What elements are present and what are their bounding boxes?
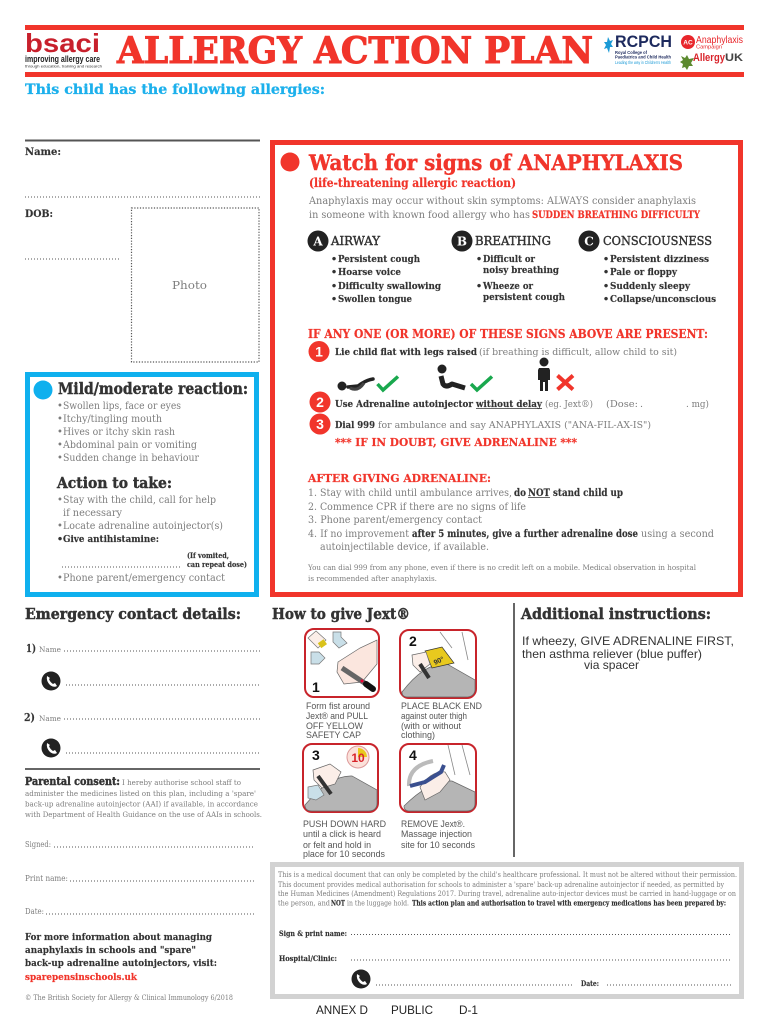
step 3: for ambulance and say ANAPHYLAXIS ("ANA-FIL-AX-IS") [378,420,651,431]
mobile note: is recommended after anaphylaxis. [308,574,437,583]
logo: bsaci [25,28,102,68]
step image 1 [305,629,379,697]
blue dot [34,380,52,400]
intro text: in someone with known food allergy who has [309,209,530,221]
step text 1: Jext® and PULL [306,711,368,721]
action list: • [57,573,63,584]
step 1: 1 [315,344,323,360]
intro text [308,195,701,221]
symptoms list: • [57,453,63,464]
logo: RCPCH: Paediatrics and Child Health [615,54,671,60]
symptoms list [57,401,199,464]
step 2: . [640,399,643,410]
step 2: 2 [316,394,324,410]
subheading: (life-threatening allergic reaction) [309,176,516,190]
symptoms list: Swollen lips, face or eyes [63,401,181,412]
after adrenaline list: do [514,488,526,499]
after adrenaline list: autoinjectilable device, if available. [320,542,489,553]
after adrenaline list: 4. If no improvement [308,529,409,540]
action list: if necessary [63,508,122,519]
parental consent: Parental consent: [25,775,120,788]
column: breathing: Difficult or [483,254,536,265]
mobile note: You can dial 999 from any phone, even if there is no credit left on a mobile. Medical observation in hospital [307,563,697,572]
column: airway: Hoarse voice [338,267,401,278]
step text 4: site for 10 seconds [401,840,475,850]
contact 1 [26,642,260,690]
logo: Anaphylaxis Campaign: AC [683,40,693,46]
step 1: Lie child flat with legs raised [335,347,477,358]
contact 2 [24,711,260,758]
action list: • [57,534,63,545]
step 2: (eg. Jext®) [545,399,593,410]
panel: how to give Jext [272,605,482,859]
anaphylaxis heading: Watch for signs of ANAPHYLAXIS [308,150,683,175]
photo box: Photo [172,278,207,292]
logo: Anaphylaxis Campaign: Anaphylaxis [696,35,743,46]
footer annex text: PUBLIC [391,1003,433,1017]
action list: Phone parent/emergency contact [63,573,225,584]
authorisation text: in the luggage hold. [347,900,409,908]
sign fields: Hospital/Clinic: [279,954,337,963]
intro text: Anaphylaxis may occur without skin symptoms: ALWAYS consider anaphylaxis [308,195,696,207]
step image 2: 2 [409,633,417,649]
action list: can repeat dose) [187,560,247,569]
column: airway: • [331,294,337,305]
instructions text: via spacer [584,658,639,672]
header band [25,25,744,77]
column: airway [308,230,441,305]
column: consciousness [578,230,716,305]
step text 2: (with or without [401,721,461,731]
column: breathing: • [476,254,482,265]
column: airway: • [331,254,337,265]
panel: child details: DOB: [25,208,53,220]
after adrenaline list: using a second [641,529,715,540]
panel: child details: Name: [25,146,61,158]
step 3 [310,414,651,434]
step text 1: Form fist around [306,701,370,711]
column: consciousness: • [603,294,609,305]
step text 3: until a click is heard [303,829,381,839]
column: breathing: BREATHING [475,234,551,248]
symptoms list: Itchy/tingling mouth [63,414,163,425]
parental consent: I hereby authorise school staff to [122,778,241,787]
action list: Give antihistamine: [63,534,159,545]
sign fields [279,929,731,988]
parental consent: with Department of Health Guidance on the use of AAIs in schools. [25,810,262,819]
logo: bsaci: through education, training and research [25,64,102,68]
logo: bsaci: improving allergy care [25,54,100,64]
step text 2: PLACE BLACK END [401,701,482,711]
more information: anaphylaxis in schools and "spare" [25,945,196,956]
after adrenaline list: NOT [528,488,550,499]
step 2: without delay [475,399,542,410]
column: airway: • [331,281,337,292]
parental consent: back-up adrenaline autoinjector (AAI) if available, in accordance [25,800,259,808]
after adrenaline list: after 5 minutes, give a further adrenaline dose [412,529,638,540]
column: airway: Difficulty swallowing [338,281,441,292]
column: airway: AIRWAY [330,234,381,248]
logo: RCPCH: Royal College of [615,50,647,55]
column: breathing: • [476,281,482,292]
footer annex text [316,1003,478,1017]
symptoms list: Sudden change in behaviour [63,453,199,464]
column: airway: A [312,234,323,248]
signs present heading: IF ANY ONE (OR MORE) OF THESE SIGNS ABOVE ARE PRESENT: [308,327,708,341]
contact 2: Name [39,714,62,723]
mild heading: Mild/moderate reaction: [58,379,248,398]
step text 4 [401,819,475,850]
action list: (If vomited, [187,551,229,560]
step 3: 3 [316,416,324,432]
column: consciousness: CONSCIOUSNESS [603,234,712,248]
icon: sitting with tick [438,364,492,390]
instructions text: then asthma reliever (blue puffer) [522,647,702,661]
instructions text: If wheezy, GIVE ADRENALINE FIRST, [522,634,734,648]
instructions text [522,634,734,672]
logo: Allergy UK [680,52,743,70]
column: consciousness: • [603,267,609,278]
step text 4: REMOVE Jext®. [401,819,465,829]
authorisation text: This document provides medical authorisation for schools to administer a 'spare' back-up adrenaline autoinjector if needed, as permitted by [278,881,724,889]
icon: lying flat with tick [338,376,398,390]
step text 3: place for 10 seconds [303,849,385,859]
more information: back-up adrenaline autoinjectors, visit: [25,958,217,969]
after adrenaline list: stand child up [553,488,623,499]
signature lines [25,840,255,916]
after adrenaline list: 1. Stay with child until ambulance arrives, [308,488,512,499]
panel: child details [25,140,260,362]
step image 2 [400,630,476,698]
more information [25,932,217,983]
column: airway: Persistent cough [338,254,420,265]
footer annex text: D-1 [459,1003,478,1017]
column: consciousness: Pale or floppy [610,267,677,278]
step text 3: PUSH DOWN HARD [303,819,386,829]
logo: RCPCH: Leading the way in Children's Health [615,60,671,65]
panel: emergency contact details [24,605,262,1002]
column: airway: Swollen tongue [338,294,412,305]
column: consciousness: Collapse/unconscious [610,294,716,305]
column: consciousness: • [603,281,609,292]
after adrenaline list [307,471,715,553]
panel: mild/moderate reaction [28,374,256,594]
step text 2 [401,701,482,740]
step image 4 [400,744,476,812]
authorisation text: the person, and [278,900,330,908]
intro text: SUDDEN BREATHING DIFFICULTY [532,210,701,221]
authorisation text: NOT [331,898,346,908]
photo box [132,208,259,362]
panel: additional instructions [514,603,734,857]
mobile note [307,563,697,583]
step text 4: Massage injection [401,829,472,839]
red dot [280,152,300,172]
after adrenaline list: 2. Commence CPR if there are no signs of life [308,502,526,513]
Jext heading: How to give Jext® [272,605,410,623]
step text 2: against outer thigh [401,711,467,721]
symptoms list: Abdominal pain or vomiting [62,440,198,451]
column: breathing [452,230,565,303]
action list: • [57,521,63,532]
step 1: (if breathing is difficult, allow child to sit) [479,347,677,358]
step 3: Dial 999 [335,420,375,431]
logo: Allergy UK: UK [725,52,743,64]
step 1 [308,341,677,362]
signature lines: Print name: [25,874,68,883]
column: airway: • [331,267,337,278]
step text 2: clothing) [401,730,435,740]
authorisation text: This is a medical document that can only be completed by the child's healthcare professional. It must not be altered without their permission. [278,871,737,879]
symptoms list: Hives or itchy skin rash [63,427,176,438]
step image 2: 90° [432,655,446,667]
column: breathing: noisy breathing [483,265,559,276]
symptoms list: • [57,414,63,425]
step text 3: or felt and hold in [303,840,371,850]
action list: • [57,495,63,506]
symptoms list: • [57,401,63,412]
action list: Stay with the child, call for help [63,495,216,506]
logo: RCPCH [604,32,672,65]
symptoms list: • [57,427,63,438]
step 2: . mg) [686,399,709,410]
doubt warning: *** IF IN DOUBT, GIVE ADRENALINE *** [335,435,577,449]
symptoms list: • [57,440,63,451]
parental consent: administer the medicines listed on this plan, including a 'spare' [25,789,256,798]
panel: additional instructions: Additional instructions: [520,605,711,623]
step 2: Use Adrenaline autoinjector [335,399,474,410]
column: consciousness: Suddenly sleepy [610,281,690,292]
logo: Anaphylaxis Campaign [681,35,743,50]
contact 1: Name [39,645,62,654]
copyright: © The British Society for Allergy & Clinical Immunology 6/2018 [25,993,233,1002]
title: ALLERGY ACTION PLAN [116,30,593,72]
column: consciousness: C [584,234,594,248]
step image 3: 10 [351,751,365,765]
step image 1: 1 [312,679,320,695]
after adrenaline list: 3. Phone parent/emergency contact [308,515,482,526]
logo: RCPCH: RCPCH [615,32,672,51]
panel: authorisation [272,864,742,996]
signature lines: Date: [25,907,44,916]
after adrenaline list: AFTER GIVING ADRENALINE: [307,471,491,485]
step text 3 [303,819,386,859]
step image 3: 3 [312,747,320,763]
contact 2: 2) [24,711,35,724]
emergency heading: Emergency contact details: [25,605,241,623]
step image 4: 4 [409,747,417,763]
panel: anaphylaxis [272,142,740,594]
logo: Anaphylaxis Campaign: Campaign [696,44,722,50]
column: consciousness: • [603,254,609,265]
signature lines: Signed: [25,840,51,849]
column: breathing: Wheeze or [482,281,534,292]
column: consciousness: Persistent dizziness [610,254,709,265]
step text 1: OFF YELLOW [306,721,363,731]
logo: bsaci: bsaci [25,28,100,58]
step image 3 [303,744,378,812]
action heading: Action to take: [56,474,172,492]
step 2 [310,392,709,412]
logo: Allergy UK: Allergy [693,52,726,64]
icon: standing with cross [538,358,573,391]
step text 1 [306,701,370,740]
sign fields: Date: [581,979,599,988]
column: breathing: persistent cough [483,292,565,303]
action list: Locate adrenaline autoinjector(s) [63,521,223,532]
contact 1: 1) [26,642,36,655]
more information: For more information about managing [25,932,212,943]
footer annex text: ANNEX D [316,1003,368,1017]
column: breathing: B [457,234,467,248]
action list [57,495,247,584]
allergies heading: This child has the following allergies: [25,82,325,98]
authorisation text: the Human Medicines (Amendment) Regulations 2017. During travel, adrenaline auto-injector devices must be carried in hand-luggage or on [278,890,736,898]
step 2: (Dose: [606,399,638,410]
authorisation text [278,871,737,908]
parental consent [25,775,262,819]
step text 1: SAFETY CAP [306,730,361,740]
more information: sparepensinschools.uk [25,972,137,983]
sign fields: Sign & print name: [279,929,347,938]
